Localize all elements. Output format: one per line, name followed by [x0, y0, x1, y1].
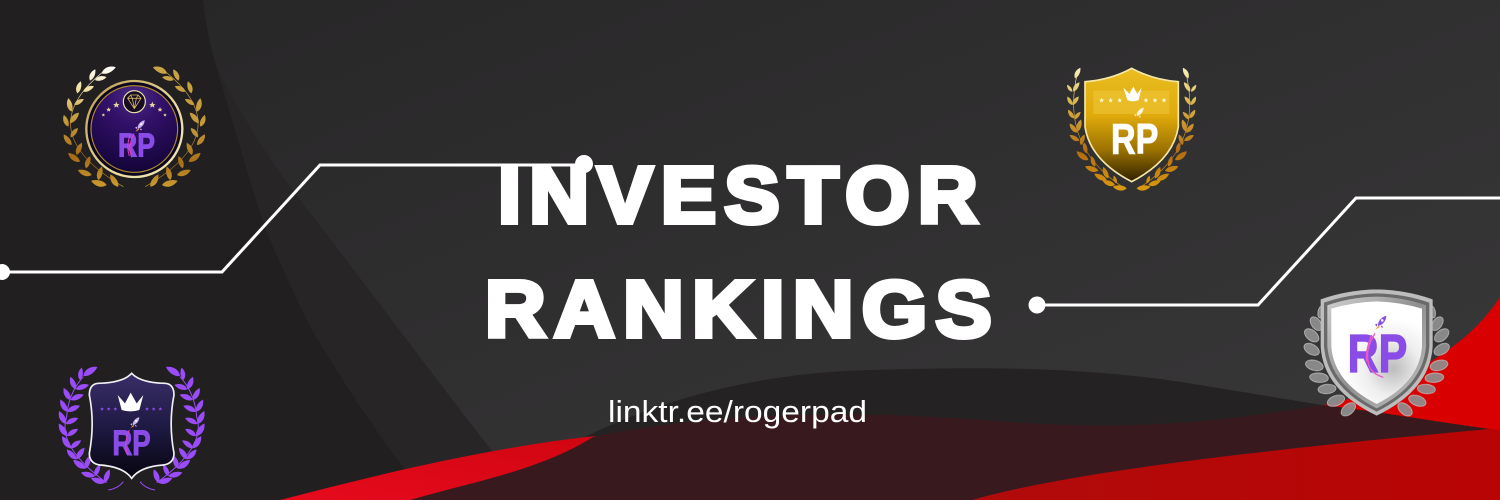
stars — [100, 407, 162, 411]
link text: linktr.ee/rogerpad — [608, 394, 867, 429]
laurel leaves — [1302, 306, 1451, 419]
title: RANKINGS — [485, 264, 1000, 354]
logo — [118, 120, 155, 165]
lower right red wave — [972, 429, 1500, 500]
laurel wreath — [63, 66, 206, 187]
navy shield — [89, 373, 174, 478]
logo: RP — [118, 128, 155, 165]
gold shield — [1085, 68, 1178, 182]
badge: gold rank — [1067, 67, 1196, 191]
purple medallion — [86, 81, 182, 177]
connector line: left — [0, 155, 593, 280]
laurel wreath — [56, 364, 207, 490]
upper right red wave — [1320, 297, 1500, 430]
silver shield — [1321, 289, 1433, 416]
crown — [1123, 87, 1142, 101]
logo: RP — [1111, 116, 1158, 164]
crown — [118, 393, 143, 411]
maroon wave — [410, 405, 1490, 500]
laurel wreath — [1067, 68, 1196, 191]
logo — [112, 417, 151, 463]
dark wave — [560, 368, 1340, 450]
connector line: right — [1028, 198, 1500, 314]
stars — [1099, 98, 1166, 102]
title: INVESTOR — [498, 150, 986, 240]
title — [485, 150, 1000, 354]
badge: purple rank — [56, 364, 207, 490]
logo: RP — [112, 424, 151, 463]
diamond icon — [123, 91, 145, 113]
stars — [102, 102, 167, 116]
left red wave — [280, 436, 596, 500]
logo: RP — [1348, 325, 1407, 384]
badge: diamond rank — [63, 66, 206, 187]
badge: silver rank — [1302, 289, 1451, 419]
